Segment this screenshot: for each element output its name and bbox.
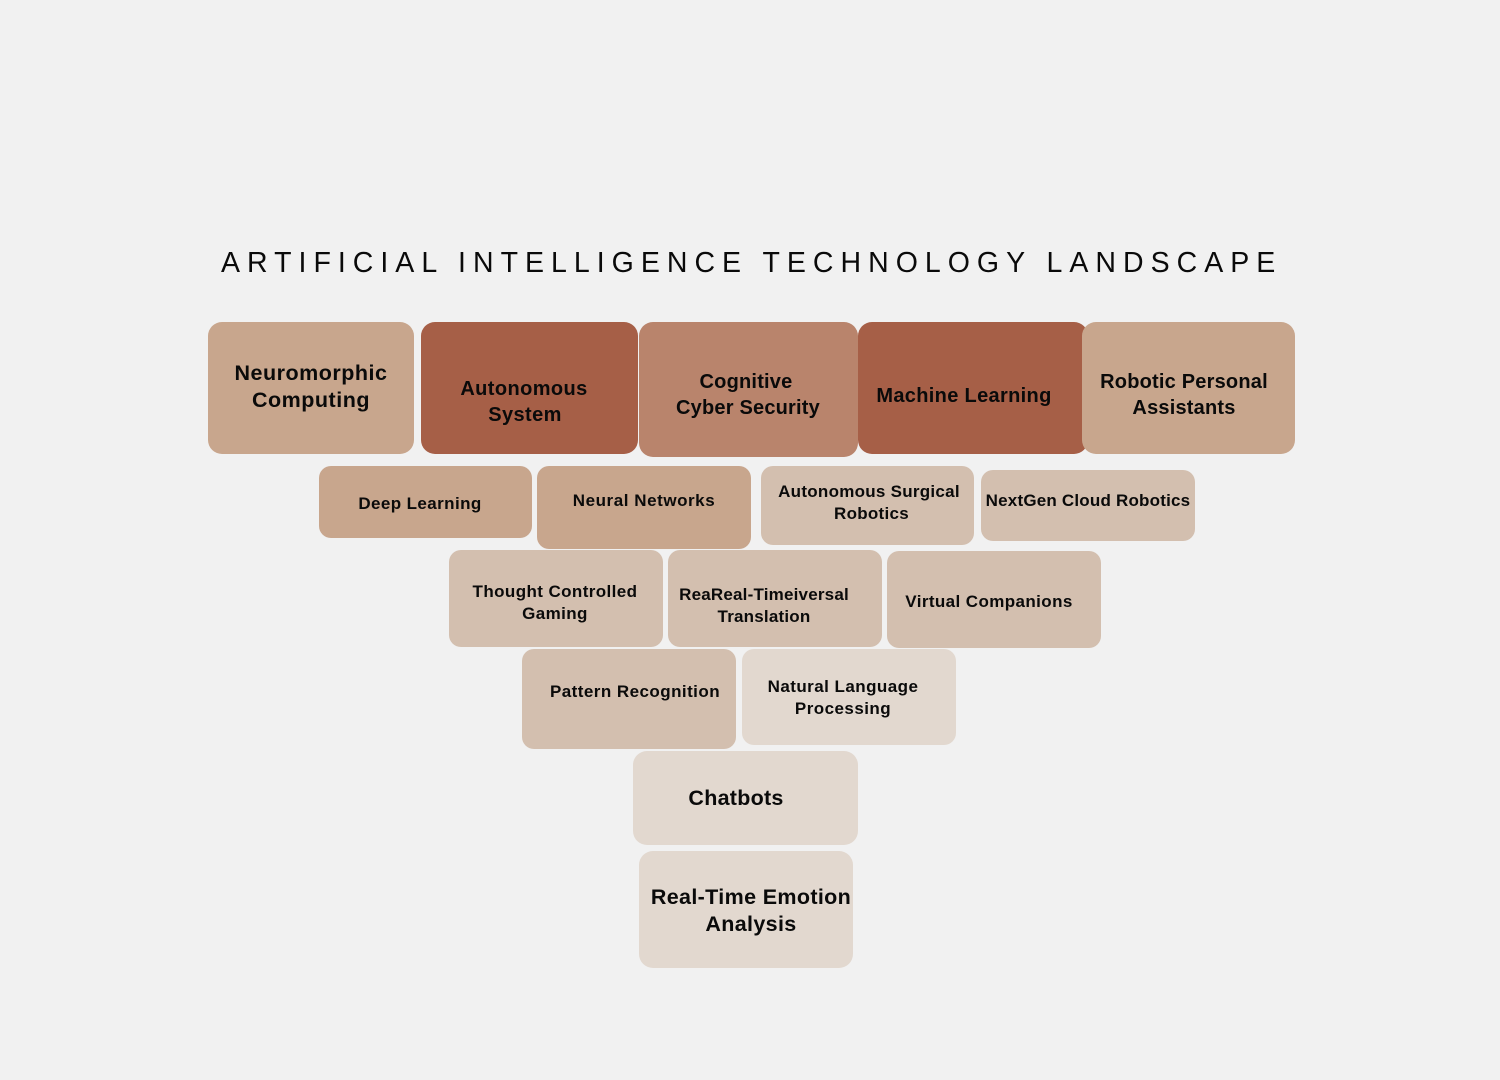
box: Neural Networks (537, 466, 751, 549)
box: NextGen Cloud Robotics (981, 470, 1195, 541)
box: Pattern Recognition: Pattern Recognition (550, 682, 720, 701)
box: Cognitive Cyber Security: Cyber Security (676, 397, 820, 419)
box: Autonomous Surgical Robotics: Autonomous Surgical (778, 482, 960, 501)
box: Natural Language Processing: Processing (795, 699, 891, 718)
box: Robotic Personal Assistants: Assistants (1132, 397, 1236, 419)
box: ReaReal-Timeiversal Translation (668, 550, 882, 647)
box: ReaReal-Timeiversal Translation: Translation (718, 607, 810, 626)
box: Thought Controlled Gaming (449, 550, 663, 647)
box: Neuromorphic Computing: Neuromorphic (235, 361, 387, 385)
box: Machine Learning: Machine Learning (876, 385, 1052, 407)
box: Robotic Personal Assistants: Robotic Personal (1100, 371, 1268, 393)
box: Autonomous System: Autonomous (460, 378, 588, 400)
box: Pattern Recognition (522, 649, 736, 749)
title: ARTIFICIAL INTELLIGENCE TECHNOLOGY LANDSCAPE (221, 247, 1282, 279)
box: NextGen Cloud Robotics: NextGen Cloud Robotics (986, 491, 1190, 510)
box: Autonomous Surgical Robotics: Robotics (834, 504, 909, 523)
box: Thought Controlled Gaming: Thought Controlled (473, 582, 637, 601)
box: Natural Language Processing (742, 649, 956, 745)
box: Neuromorphic Computing (208, 322, 414, 454)
box: Deep Learning (319, 466, 532, 538)
box: Neuromorphic Computing: Computing (252, 388, 370, 412)
box: Autonomous System: System (488, 404, 562, 426)
box: Chatbots (633, 751, 858, 845)
box: Virtual Companions: Virtual Companions (905, 592, 1073, 611)
box: Autonomous System (421, 322, 638, 454)
box: Cognitive Cyber Security: Cognitive (700, 371, 792, 393)
box: ReaReal-Timeiversal Translation: ReaReal-Timeiversal (679, 585, 849, 604)
box: Robotic Personal Assistants (1082, 322, 1295, 454)
box: Cognitive Cyber Security (639, 322, 858, 457)
box: Thought Controlled Gaming: Gaming (522, 604, 588, 623)
box: Autonomous Surgical Robotics (761, 466, 974, 545)
box: Real-Time Emotion Analysis: Real-Time Emotion (651, 885, 851, 909)
box: Real-Time Emotion Analysis: Analysis (705, 912, 797, 936)
box: Machine Learning (858, 322, 1088, 454)
box: Neural Networks: Neural Networks (573, 491, 715, 510)
box: Natural Language Processing: Natural Language (768, 677, 918, 696)
box: Virtual Companions (887, 551, 1101, 648)
box: Chatbots: Chatbots (688, 786, 784, 810)
box: Deep Learning: Deep Learning (358, 494, 482, 513)
box: Real-Time Emotion Analysis (639, 851, 853, 968)
